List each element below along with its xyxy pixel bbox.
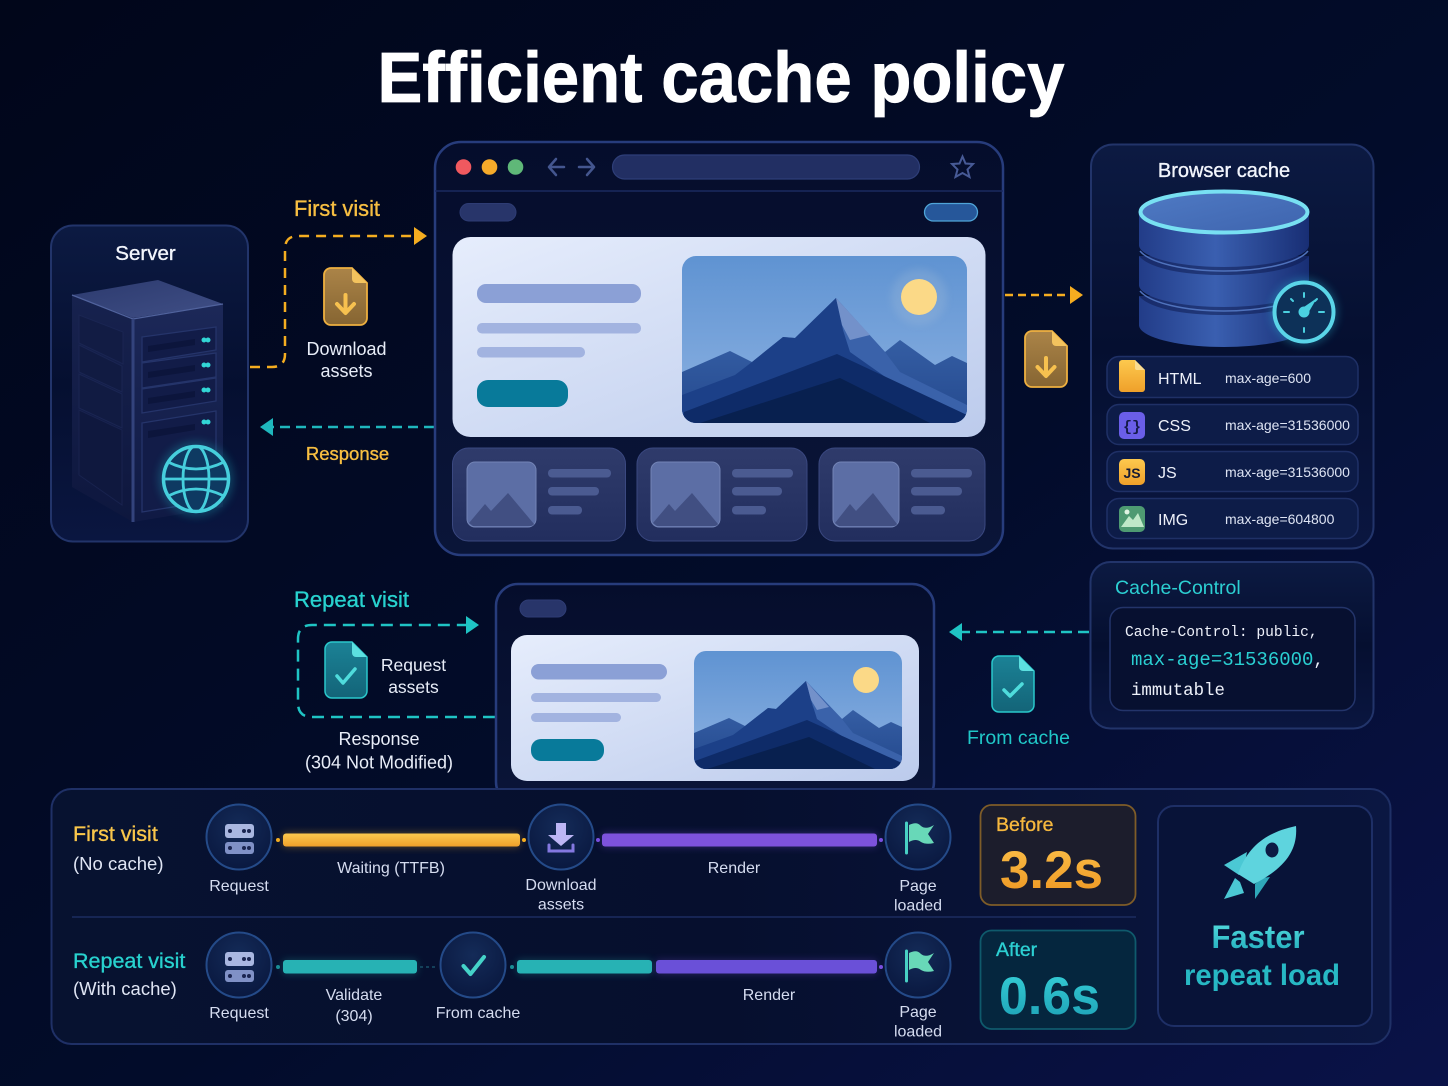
stat: before: 3.2s [1000,841,1103,900]
code block: max-age=31536000, [1131,649,1324,671]
row: first visit timeline: Render [708,860,761,877]
repeat nav pill [520,600,566,617]
label: download assets: assets [320,361,373,381]
arrow: first visit download path [250,227,427,367]
row: HTML [1107,356,1358,398]
icon: cache download document [1025,331,1067,387]
row: first visit timeline: loaded [894,898,942,914]
icon: request server [206,804,272,870]
address bar [612,155,920,179]
label: response: Response [306,443,389,464]
hero text lines [477,284,641,358]
row: CSS: max-age=31536000 [1225,417,1350,433]
code block [1110,608,1355,710]
row: first visit timeline: Page [899,878,937,895]
nav pill [460,204,516,221]
icon: download [528,804,594,870]
browser cache heading: Browser cache [1158,160,1290,182]
row: JS [1107,452,1358,492]
label: 304 response: Response [338,729,420,749]
icon: from cache check [440,932,506,998]
row: JS: JS [1123,465,1141,481]
row: repeat visit timeline: Render [743,987,796,1004]
bar: from cache [517,960,652,974]
icon: server tower [72,280,223,522]
nav arrows [549,159,594,175]
row: CSS: CSS [1158,418,1191,435]
row: first visit timeline: First visit [73,822,158,846]
repeat hero card [511,635,919,781]
label: from cache: From cache [967,727,1070,749]
callout: faster repeat load: Faster [1212,919,1304,955]
server heading: Server [115,242,176,265]
icon: rocket [1224,826,1296,899]
panel: browser cache [1091,144,1374,548]
row: HTML: max-age=600 [1225,370,1311,386]
bar: waiting [283,833,520,847]
action pill [924,204,978,221]
icon: download document [324,268,367,325]
callout: faster repeat load [1158,806,1372,1026]
repeat hero image: mountain [694,651,902,770]
row: repeat visit timeline: (304) [335,1008,373,1025]
panel: timeline comparison [52,789,1390,1044]
row: IMG: IMG [1158,512,1188,529]
row: HTML: HTML [1158,371,1202,388]
icon: gauge [1270,278,1338,346]
row: IMG: max-age=604800 [1225,511,1335,527]
arrow: repeat visit request loop [298,616,495,717]
row: first visit timeline: Request [209,878,269,895]
label: first visit: First visit [294,196,380,221]
thumbnail card 1 [452,448,626,541]
stat: before: Before [996,814,1053,836]
icon: database [1139,192,1309,347]
row: repeat visit timeline: From cache [436,1005,520,1022]
window controls [456,159,523,175]
hero button [477,380,568,407]
panel: main browser window [435,142,1003,555]
label: 304 response: (304 Not Modified) [305,752,453,772]
row: IMG [1107,498,1358,538]
icon: page loaded flag [886,804,950,870]
label: repeat visit: Repeat visit [294,587,409,612]
thumbnail card 2 [637,448,807,541]
label: download assets: Download [306,339,387,359]
row: repeat visit timeline: Validate [326,987,382,1004]
label: request assets: assets [388,677,439,697]
panel: repeat browser window [496,584,934,804]
row: first visit timeline: Download [525,877,597,894]
icon: star [952,156,973,177]
thumbnail card 3 [819,448,985,541]
label: request assets: Request [381,655,446,675]
hero card [452,237,986,437]
bar: render [656,960,877,974]
code block: Cache-Control: public, [1125,625,1318,641]
row: repeat visit timeline: Request [209,1005,269,1022]
row: first visit timeline: (No cache) [73,853,163,874]
stat: after: After [996,939,1038,961]
row: repeat visit timeline [73,932,950,1040]
row: JS: max-age=31536000 [1225,464,1350,480]
icon: request server [206,932,272,998]
icon: request check document [325,642,367,698]
hero image: mountain [682,256,967,425]
bar: render [602,833,877,847]
row: repeat visit timeline: (With cache) [73,978,177,999]
bar: validate [283,960,417,974]
row: first visit timeline: assets [538,896,584,914]
arrow: response to server [260,418,434,436]
cache-control heading: Cache-Control [1115,577,1241,599]
row: first visit timeline [73,804,950,914]
code block: immutable [1131,682,1225,701]
icon: page loaded flag [886,932,950,998]
row: CSS: {} [1123,419,1141,436]
row: CSS [1107,404,1358,444]
title: Efficient cache policy [378,39,1065,118]
icon: globe [158,441,234,517]
row: repeat visit timeline: loaded [894,1024,942,1040]
icon: from cache document [992,656,1034,712]
row: first visit timeline: Waiting (TTFB) [337,860,445,877]
panel: server [51,226,248,542]
row: repeat visit timeline: Page [899,1004,937,1021]
callout: faster repeat load: repeat load [1184,959,1340,992]
stat: after: 0.6s [999,967,1100,1026]
row: JS: JS [1158,465,1177,482]
arrow: browser to cache [1005,286,1083,304]
arrow: from cache [949,623,1089,641]
panel: cache-control [1090,562,1374,728]
row: repeat visit timeline: Repeat visit [73,949,185,973]
stat: before [980,805,1136,905]
stat: after [980,930,1136,1029]
